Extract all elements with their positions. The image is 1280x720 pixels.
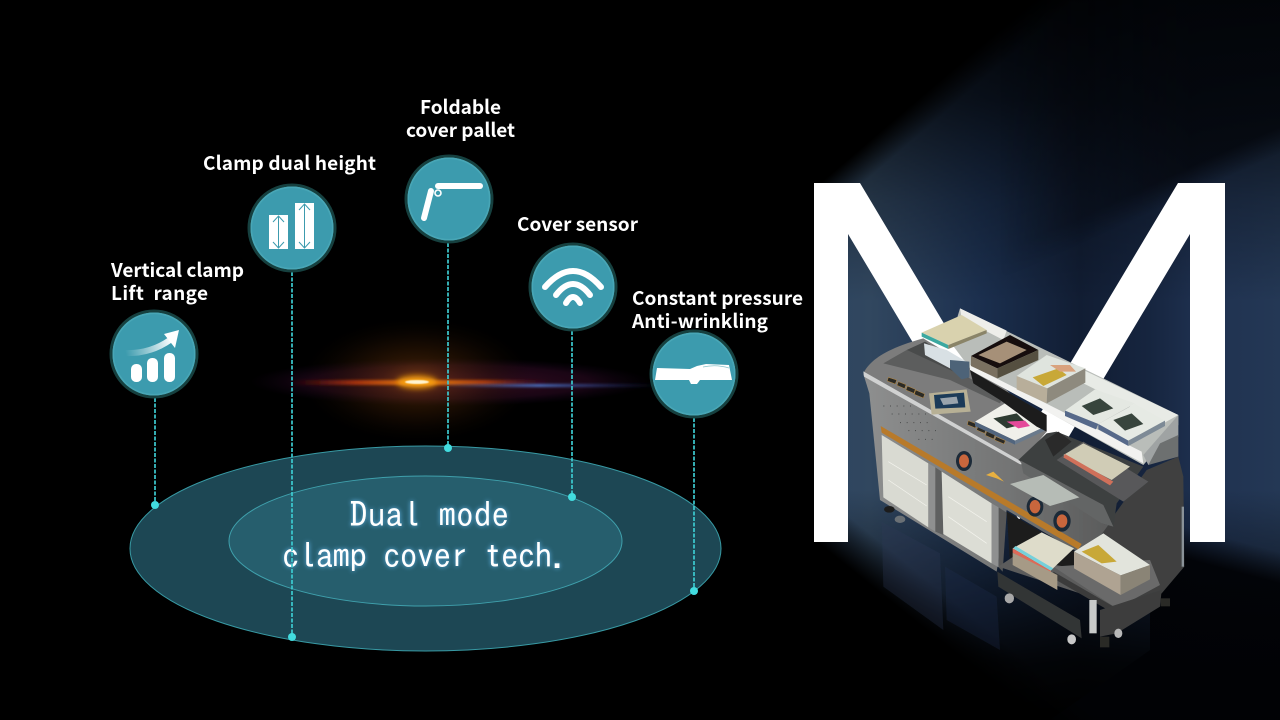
label: vertical clamp lift range: Lift range xyxy=(111,279,208,306)
stack: two books on shelf xyxy=(1065,389,1165,446)
connector: cover sensor xyxy=(568,331,576,501)
stack: blue box xyxy=(924,343,969,379)
right side body xyxy=(1083,457,1184,615)
left door xyxy=(882,435,943,535)
lower stack: cover paper xyxy=(1013,532,1074,590)
icon: two height arrows xyxy=(249,185,335,271)
foldable pallet xyxy=(1010,475,1079,506)
legs and casters xyxy=(884,506,1184,647)
cover feed unit xyxy=(1018,432,1148,527)
label: clamp dual height: Clamp dual height xyxy=(203,149,376,176)
stack: brochure xyxy=(922,315,987,349)
center heading: Dual mode xyxy=(350,497,509,532)
front panel xyxy=(863,374,1108,572)
bright top edge xyxy=(863,371,1021,465)
perforations xyxy=(883,406,938,439)
icon: open book xyxy=(651,331,737,417)
orange stripe xyxy=(881,426,1082,549)
outer ellipse xyxy=(130,446,721,651)
lower bay xyxy=(1007,512,1083,577)
touch screen xyxy=(929,389,971,415)
floor reflection xyxy=(882,522,1000,650)
big letter M xyxy=(814,183,1225,542)
right door xyxy=(942,472,1007,572)
connector: constant pressure xyxy=(690,418,698,595)
label: vertical clamp lift range: Vertical clamp xyxy=(110,256,244,283)
copper dials xyxy=(956,451,1071,532)
spotlight beam xyxy=(824,0,1280,662)
label: cover sensor: Cover sensor xyxy=(517,210,639,237)
lens flare xyxy=(250,318,660,442)
center heading xyxy=(282,497,569,573)
icon: wireless sensor xyxy=(530,244,616,330)
inner ellipse xyxy=(229,476,622,606)
stack: portrait book xyxy=(971,335,1038,378)
connector: foldable pallet xyxy=(444,243,452,452)
center heading: clamp cover tech. xyxy=(282,538,569,573)
stack: child book xyxy=(1017,355,1085,403)
label: constant pressure anti-wrinkling: Anti-wrinkling xyxy=(631,307,769,334)
label: foldable cover pallet: Foldable xyxy=(420,93,501,120)
connector: vertical clamp xyxy=(151,398,159,509)
control buttons xyxy=(887,377,1005,444)
label: constant pressure anti-wrinkling: Constant pressure xyxy=(632,284,803,311)
shelf xyxy=(950,308,1178,465)
lower shelf xyxy=(997,557,1160,638)
recess on top surface xyxy=(883,350,1003,403)
binding machine xyxy=(863,308,1184,650)
lower stack: child book xyxy=(1074,533,1150,595)
top surface xyxy=(863,338,1047,463)
icon: rising bars and arrow xyxy=(111,311,197,397)
icon: foldable pallet xyxy=(406,156,492,242)
connector: clamp dual height xyxy=(288,272,296,641)
label: foldable cover pallet: cover pallet xyxy=(406,116,515,143)
tray on top surface: book xyxy=(975,403,1045,445)
